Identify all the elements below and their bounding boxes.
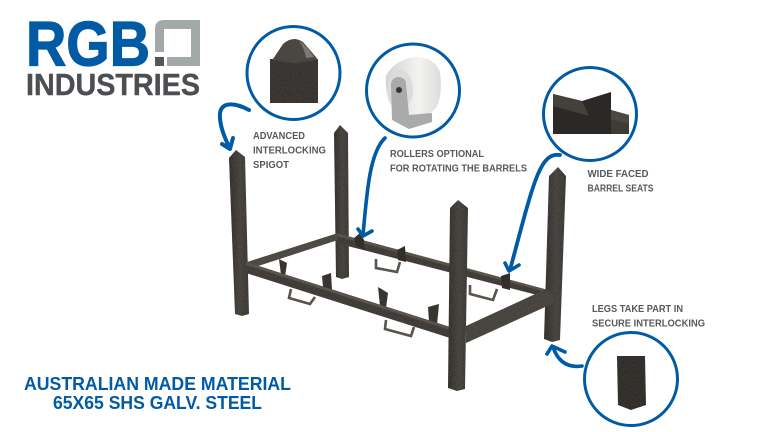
barrel rack frame: [229, 125, 566, 391]
white wheel: [386, 57, 441, 118]
rail top right: [611, 110, 629, 134]
label: spigot word: SPIGOT: [253, 160, 289, 171]
seat rail: [553, 92, 611, 134]
arrow curve: [510, 155, 560, 270]
bracket: [391, 77, 432, 129]
logo square mark: [155, 20, 200, 66]
arrow curve: [363, 138, 385, 235]
panel: roller detail: [366, 44, 460, 137]
label: wide faced: WIDE FACED: [588, 169, 648, 180]
leg bottom: [617, 356, 646, 410]
circle outline: [544, 68, 636, 160]
spigot dome: [270, 39, 318, 63]
panel: leg detail: [584, 332, 678, 426]
rail top left: [553, 94, 589, 116]
back left post: [334, 125, 349, 279]
wheel hub ring: [387, 70, 413, 110]
front rail lugs: [289, 289, 414, 336]
front left post: [229, 150, 249, 316]
label: rotating: FOR ROTATING THE BARRELS: [390, 164, 527, 174]
label: rollers: ROLLERS OPTIONAL: [390, 149, 484, 160]
arrow curve: [220, 104, 249, 147]
circle outline: [247, 26, 340, 120]
arrow head: [547, 346, 565, 354]
right short rail: [466, 289, 554, 343]
arrow head: [222, 138, 233, 149]
back rail top face: [336, 233, 548, 292]
label: spigot: ADVANCED: [253, 131, 305, 142]
left short rail: [247, 233, 338, 268]
logo small square: [155, 57, 164, 66]
arrow: to barrel seat: [505, 155, 560, 271]
title: material line 1: AUSTRALIAN MADE MATERIAL: [24, 374, 291, 394]
circle outline: [366, 44, 460, 137]
circle outline: [584, 332, 678, 426]
spigot post: [270, 59, 318, 103]
back rail seats: [354, 233, 510, 290]
arrow: to leg: [547, 346, 582, 366]
arrow curve: [553, 347, 582, 366]
front right post: [448, 200, 468, 391]
front rail seats: [279, 259, 439, 325]
panel: spigot detail: [247, 26, 340, 120]
logo: RGB Industries: [26, 10, 200, 102]
rail right top face: [611, 110, 629, 124]
logo wordmark RGB: RGB: [26, 10, 150, 80]
label: secure: SECURE INTERLOCKING: [592, 318, 705, 330]
arrow head: [505, 263, 519, 271]
label: legs: LEGS TAKE PART IN: [592, 304, 683, 315]
label: interlocking: INTERLOCKING: [253, 146, 326, 156]
right post: [544, 167, 566, 342]
arrow head: [358, 229, 372, 236]
front rail top face: [246, 262, 450, 330]
label: barrel seats: BARREL SEATS: [588, 184, 654, 194]
title: material line 2: 65X65 SHS GALV. STEEL: [53, 393, 262, 413]
back rail lugs: [376, 259, 497, 300]
logo wordmark INDUSTRIES: INDUSTRIES: [26, 67, 200, 102]
back long rail: [336, 233, 548, 297]
arrow: to spigot: [220, 104, 249, 149]
arrow: to roller: [358, 138, 385, 236]
spigot dome highlight: [299, 41, 314, 58]
panel: barrel seat detail: [544, 68, 636, 160]
bolt: [396, 87, 402, 93]
front long rail: [246, 262, 450, 338]
